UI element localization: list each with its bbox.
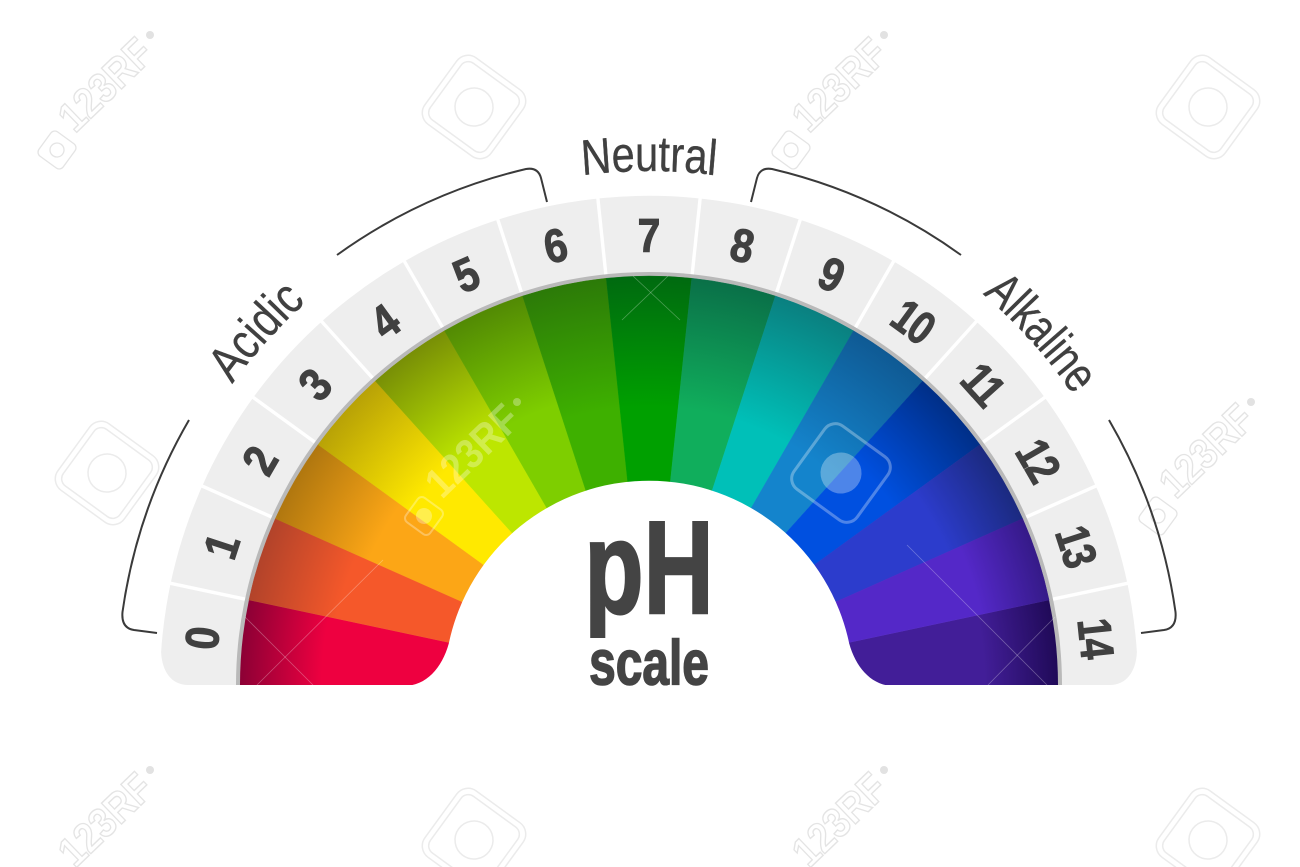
bracket: acidic upper — [337, 169, 547, 255]
label: Alkaline: Alkaline — [982, 276, 1090, 391]
number 8: 8 — [726, 218, 759, 274]
bracket: alkaline lower — [1109, 420, 1176, 633]
number 1: 1 — [194, 528, 251, 565]
white centre cut-out — [404, 481, 894, 686]
watermark logo top left: 123RF — [49, 29, 162, 140]
watermark logo over yellow wedges — [403, 395, 529, 537]
bracket: alkaline upper — [751, 169, 961, 255]
number 3: 3 — [289, 359, 343, 411]
number 5: 5 — [446, 247, 488, 304]
wedge pH 5 — [444, 294, 688, 702]
number 14: 14 — [1067, 616, 1124, 662]
band separators — [166, 194, 1132, 600]
watermark stamp middle left — [50, 416, 164, 530]
wedge pH 13 — [636, 518, 1051, 726]
watermark stamp top centre — [417, 50, 531, 164]
number 2: 2 — [232, 438, 289, 484]
wedge pH 3 — [316, 380, 678, 717]
number 4: 4 — [361, 294, 410, 350]
watermark stamp bottom centre — [417, 783, 531, 867]
label: Neutral: Neutral — [583, 138, 716, 176]
wedge pH 1 — [247, 518, 662, 726]
grey shadow rim — [236, 272, 1062, 685]
wedge pH 0 — [238, 600, 653, 728]
bracket: acidic lower — [122, 420, 189, 633]
wedge pH 4 — [374, 329, 684, 710]
colour wedges — [238, 276, 1060, 728]
title: pH: pH — [584, 493, 714, 641]
number 11: 11 — [950, 353, 1015, 417]
wedge pH 6 — [522, 276, 691, 694]
watermark logo top right: 123RF — [783, 29, 896, 140]
wedge pH 10 — [614, 329, 924, 710]
watermark logo top left — [36, 29, 162, 171]
watermark logo top right — [770, 29, 896, 171]
wedge pH 11 — [620, 380, 982, 717]
number 6: 6 — [539, 218, 572, 274]
number 10: 10 — [881, 289, 944, 355]
wedge pH 7 — [606, 276, 692, 685]
subtitle: scale: scale — [589, 627, 709, 698]
wedge pH 14 — [645, 600, 1060, 728]
number 12: 12 — [1005, 430, 1070, 491]
wedge pH 2 — [273, 443, 670, 722]
number 0: 0 — [176, 624, 230, 652]
watermark logo middle right: 123RF — [1150, 395, 1263, 506]
scale numbers — [176, 210, 1124, 662]
wedge pH 12 — [628, 443, 1025, 722]
label: Acidic: Acidic — [212, 286, 302, 384]
watermark stamp bottom right — [1151, 783, 1265, 867]
watermark thin crossing lines — [245, 276, 1055, 685]
number 9: 9 — [810, 247, 852, 304]
number 7: 7 — [638, 210, 660, 263]
watermark logo middle right — [1137, 395, 1263, 537]
number 13: 13 — [1044, 519, 1107, 574]
grey number band — [161, 196, 1137, 685]
watermark stamp top right — [1151, 50, 1265, 164]
wedge pH 9 — [610, 294, 854, 702]
watermark stamp over blue wedges — [787, 419, 895, 527]
watermark logo over yellow wedges: 123RF — [416, 395, 529, 506]
wedge pH 8 — [607, 276, 776, 694]
